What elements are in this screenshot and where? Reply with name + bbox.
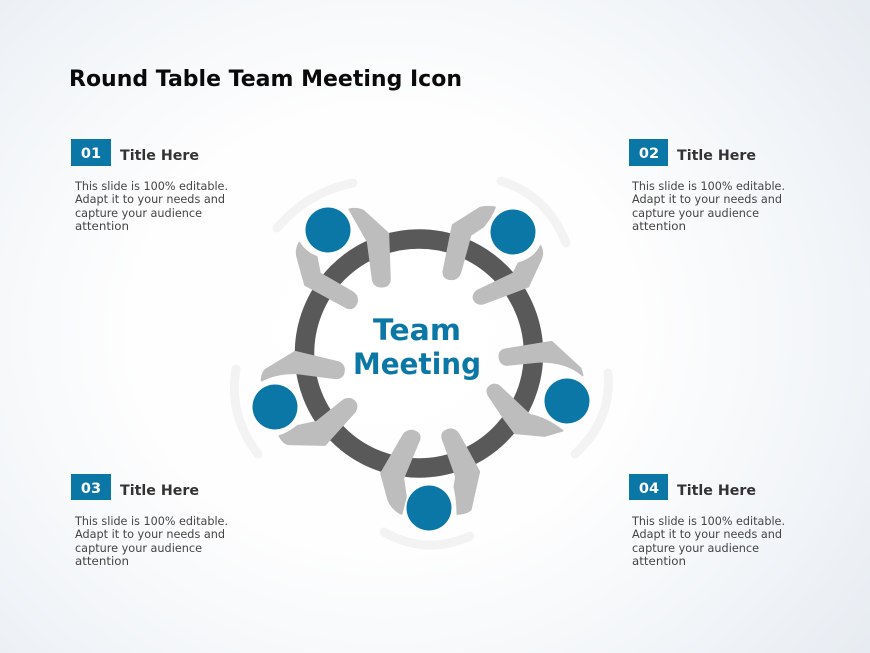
person 5 right [487, 342, 590, 436]
round table diagram [234, 181, 608, 545]
body text 02: Adapt it to your needs and [632, 192, 782, 206]
number badge 03 [71, 474, 111, 500]
center label: Meeting [353, 347, 481, 381]
body text 03 [74, 514, 228, 568]
person 2 top right [443, 207, 542, 304]
center label [353, 313, 481, 381]
body text 04: attention [632, 554, 686, 568]
arms [297, 209, 390, 308]
arms [262, 352, 357, 445]
person 1 top left [297, 208, 390, 308]
head [406, 486, 452, 530]
table ring [304, 239, 534, 468]
body text 04: This slide is 100% editable. [631, 514, 785, 528]
faint arcs behind the people [234, 181, 608, 545]
panel: item 03 [71, 474, 228, 568]
body text 03: attention [75, 554, 129, 568]
arms [487, 342, 583, 436]
number badge 02: 02 [639, 146, 659, 162]
body text 03: This slide is 100% editable. [74, 514, 228, 528]
panel: item 04 [629, 474, 785, 568]
head [490, 210, 536, 254]
number badge 03: 03 [81, 481, 101, 497]
person 4 bottom [381, 429, 479, 530]
title: Round Table Team Meeting Icon [69, 67, 462, 92]
heading 02: Title Here [677, 148, 756, 164]
body text 02: capture your audience [632, 206, 759, 220]
heading 01: Title Here [120, 148, 199, 164]
body text 02: This slide is 100% editable. [631, 179, 785, 193]
arms [381, 429, 479, 514]
arms [443, 207, 542, 304]
body text 01 [74, 179, 228, 233]
body text 01: attention [75, 219, 129, 233]
panel: item 01 [71, 139, 228, 233]
number badge 01 [71, 139, 111, 166]
heading 04: Title Here [677, 483, 756, 499]
body text 04: capture your audience [632, 541, 759, 555]
body text 01: Adapt it to your needs and [75, 192, 225, 206]
body text 03: capture your audience [75, 541, 202, 555]
number badge 02 [629, 139, 668, 166]
head [252, 384, 298, 430]
body text 02 [631, 179, 785, 233]
number badge 04: 04 [639, 481, 659, 497]
number badge 04 [629, 474, 668, 500]
body text 02: attention [632, 219, 686, 233]
body text 03: Adapt it to your needs and [75, 527, 225, 541]
body text 01: capture your audience [75, 206, 202, 220]
body text 01: This slide is 100% editable. [74, 179, 228, 193]
person 3 left [252, 352, 357, 445]
head [544, 378, 590, 424]
center label: Team [373, 313, 461, 347]
body text 04 [631, 514, 785, 568]
number badge 01: 01 [81, 146, 101, 162]
body text 04: Adapt it to your needs and [632, 527, 782, 541]
head [306, 208, 350, 252]
heading 03: Title Here [120, 483, 199, 499]
panel: item 02 [629, 139, 785, 233]
